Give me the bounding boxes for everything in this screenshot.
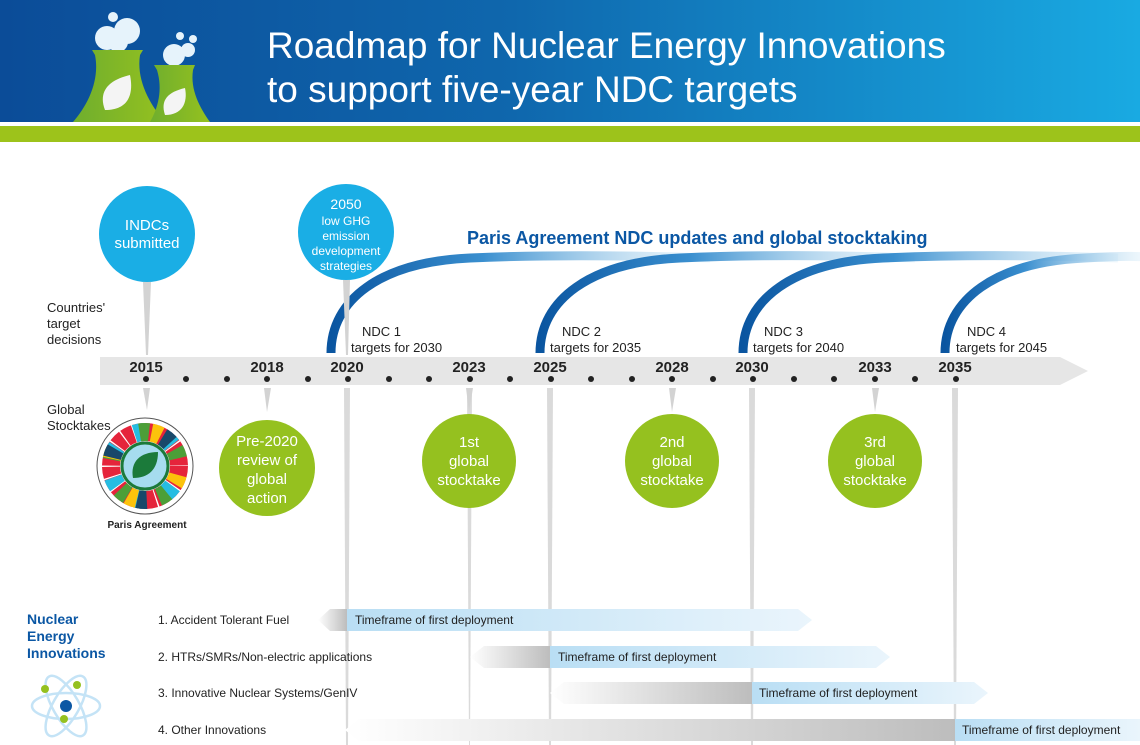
side labels: Countries' [47,300,105,315]
icon: cooling towers [73,12,210,122]
bar: row 3 [550,682,988,704]
heading: Nuclear Energy Innovations [27,611,106,661]
circle: 2050 strategies: low GHG [322,214,370,228]
NDC labels: targets for 2030 [351,340,442,355]
heading: Nuclear Energy Innovations: Innovations [27,645,106,661]
heading: Paris Agreement NDC updates: Paris Agreement NDC updates and global stocktaking [467,228,927,248]
circle: 2050 strategies: 2050 [330,196,362,212]
circle: 1st global stocktake: global [449,453,489,470]
circle: 3rd global stocktake: global [855,453,895,470]
circle: Pre-2020 review: global [247,471,287,488]
NDC labels: targets for 2035 [550,340,641,355]
circle: INDCs submitted [99,186,195,282]
title: to support five-year NDC targets [267,69,798,110]
innovation row labels: 3. Innovative Nuclear Systems/GenIV [158,686,357,700]
circle: 2nd global stocktake: global [652,453,692,470]
bar: row 2: Timeframe of first deployment [558,650,717,664]
circle: INDCs submitted: submitted [114,235,180,252]
NDC labels: NDC 3 [764,324,803,339]
side labels: decisions [47,332,102,347]
circle: 2050 strategies: development [312,244,381,258]
pointers [143,280,879,412]
bar: row 2 [470,646,890,668]
circle: 1st global stocktake: 1st [459,434,480,451]
circle: 1st global stocktake [422,414,516,508]
circle: 2nd global stocktake: stocktake [640,472,704,489]
NDC labels: targets for 2045 [956,340,1047,355]
NDC labels [351,324,1047,355]
bar: row 3: Timeframe of first deployment [759,686,918,700]
innovation row labels: 2. HTRs/SMRs/Non-electric applications [158,650,372,664]
circle: 2nd global stocktake [625,414,719,508]
innovation row labels: 4. Other Innovations [158,723,266,737]
bar: row 4: Timeframe of first deployment [962,723,1121,737]
NDC labels: targets for 2040 [753,340,844,355]
side labels [47,300,111,433]
circle: 2050 strategies [298,184,394,280]
bar: row 1: Timeframe of first deployment [355,613,514,627]
circle: Pre-2020 review: Pre-2020 [236,433,298,450]
timeline bar: 2028 [655,359,689,376]
circle: 3rd global stocktake [828,414,922,508]
timeline bar: 2025 [533,359,567,376]
icon: atom [32,670,100,742]
timeline bar [100,357,1088,385]
arcs: NDC updates [331,256,1140,353]
title: Roadmap for Nuclear Energy Innovations [267,25,946,66]
icon: Paris Agreement logo: Paris Agreement [107,520,187,531]
timeline bar: 2023 [452,359,486,376]
circle: 2050 strategies: emission [322,229,370,243]
circle: 2050 strategies: strategies [320,259,372,273]
circle: 1st global stocktake: stocktake [437,472,501,489]
circle: Pre-2020 review: review of [237,452,298,469]
timeline bar: 2030 [735,359,769,376]
side labels: Stocktakes [47,418,111,433]
NDC labels: NDC 1 [362,324,401,339]
circle: 2nd global stocktake: 2nd [659,434,685,451]
heading: Nuclear Energy Innovations: Nuclear [27,611,79,627]
side labels: target [47,316,81,331]
NDC labels: NDC 4 [967,324,1006,339]
timeline bar: 2033 [858,359,892,376]
circle: Pre-2020 review: action [247,490,287,507]
circle: Pre-2020 review [219,420,315,516]
circle: 3rd global stocktake: 3rd [864,434,886,451]
title [267,25,946,110]
heading: Nuclear Energy Innovations: Energy [27,628,75,644]
NDC labels: NDC 2 [562,324,601,339]
innovation row labels [158,613,372,737]
timeline bar: 2020 [330,359,364,376]
side labels: Global [47,402,85,417]
timeline bar: 2035 [938,359,972,376]
long vertical guide lines [344,388,958,745]
icon: Paris Agreement logo [97,418,193,531]
circle: 3rd global stocktake: stocktake [843,472,907,489]
header banner [0,0,1140,142]
bar: row 1 [318,609,812,631]
timeline bar: 2018 [250,359,284,376]
timeline bar: 2015 [129,359,163,376]
circle: INDCs submitted: INDCs [125,217,169,234]
bar: row 4 [345,719,1140,741]
innovation row labels: 1. Accident Tolerant Fuel [158,613,289,627]
